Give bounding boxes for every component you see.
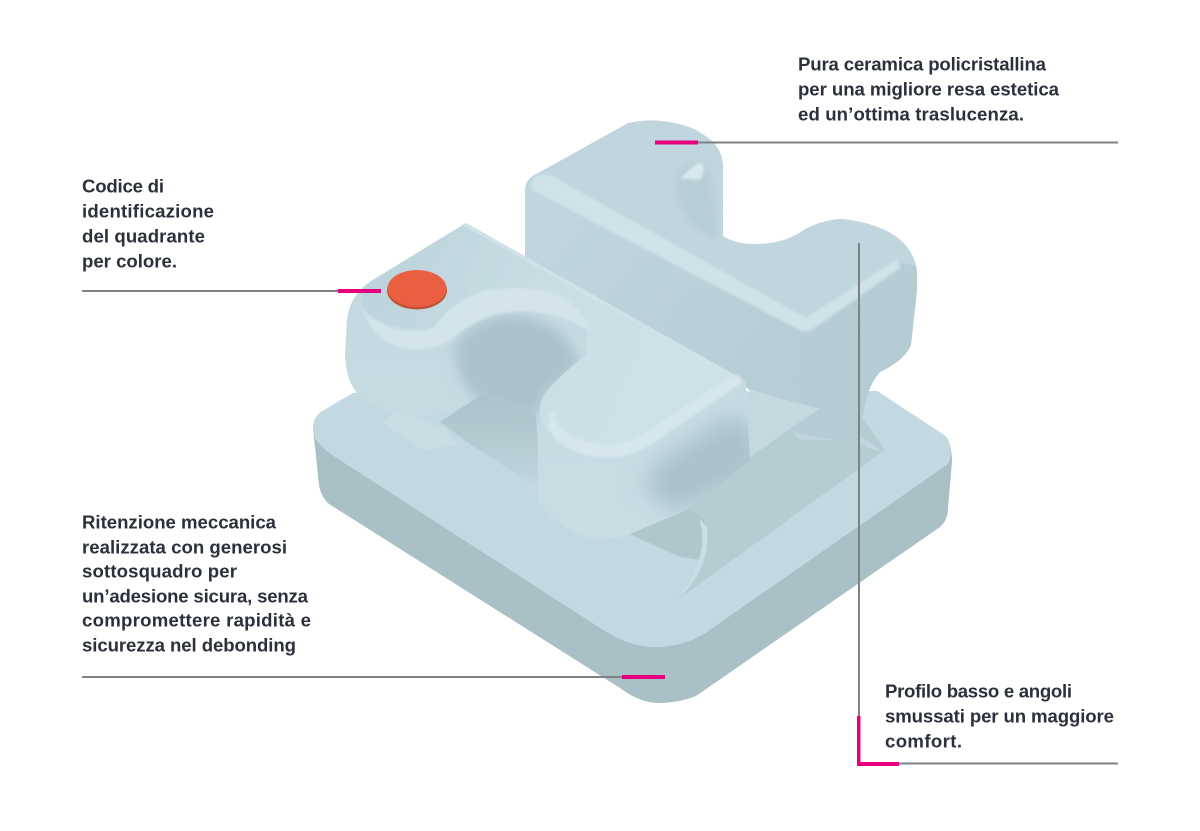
callout: profilo (857, 243, 1118, 766)
callout text (798, 54, 1060, 124)
callout text: sottosquadro per (82, 560, 237, 582)
callout: pura ceramica (655, 54, 1118, 144)
leader line (857, 243, 1118, 766)
callout text: realizzata con generosi (82, 536, 287, 558)
front wing (345, 223, 760, 539)
base top surface (313, 391, 951, 647)
callout text: un’adesione sicura, senza (82, 586, 309, 606)
callout text: Ritenzione meccanica (82, 512, 277, 532)
lower undercut shadow (627, 510, 708, 560)
leader line (82, 289, 381, 293)
base plate (313, 391, 952, 703)
callout text: Codice di (82, 176, 164, 196)
bracket illustration (313, 120, 952, 703)
front wing rim highlight right (548, 375, 741, 458)
front wing rim highlight left (360, 288, 592, 349)
front wing channel edge (464, 223, 733, 377)
lower undercut curl (677, 518, 707, 600)
callout: ritenzione (82, 512, 665, 679)
centre triangle gusset (750, 389, 820, 457)
left retention tab (382, 411, 458, 450)
callout text: comfort. (885, 730, 962, 752)
front wing top surface (362, 223, 741, 453)
base side wall (313, 391, 952, 703)
callout: codice (82, 176, 381, 293)
notch wall (456, 316, 578, 420)
callout text: del quadrante (82, 226, 205, 246)
callout text (885, 680, 1114, 752)
right stem (820, 405, 881, 450)
left undercut shadow (440, 395, 540, 490)
callout text: Pura ceramica policristallina (798, 54, 1047, 74)
callout text: ed un’ottima traslucenza. (798, 104, 1024, 124)
front wing body (345, 223, 750, 539)
back wing body (525, 120, 917, 440)
front lobe wall (648, 415, 760, 510)
right lobe shade (810, 290, 905, 375)
back wing (520, 120, 925, 450)
notch highlight (680, 163, 704, 180)
callout text: per una migliore resa estetica (798, 78, 1060, 100)
leader line (655, 140, 1118, 144)
callout text (82, 512, 311, 656)
red quadrant code dot (387, 270, 447, 310)
leader line (82, 675, 665, 679)
callout text (82, 176, 214, 272)
back wing notch wall (675, 162, 718, 240)
back wing front face (520, 178, 925, 445)
callout text: compromettere rapidità e (82, 610, 311, 630)
recessed pad shadow (660, 408, 885, 600)
callout text: sicurezza nel debonding (82, 634, 296, 656)
callout text: smussati per un maggiore (885, 706, 1114, 726)
callout text: Profilo basso e angoli (885, 680, 1072, 702)
back wing highlight ridge (532, 175, 901, 331)
callout text: identificazione (82, 200, 214, 222)
callout text: per colore. (82, 250, 177, 272)
